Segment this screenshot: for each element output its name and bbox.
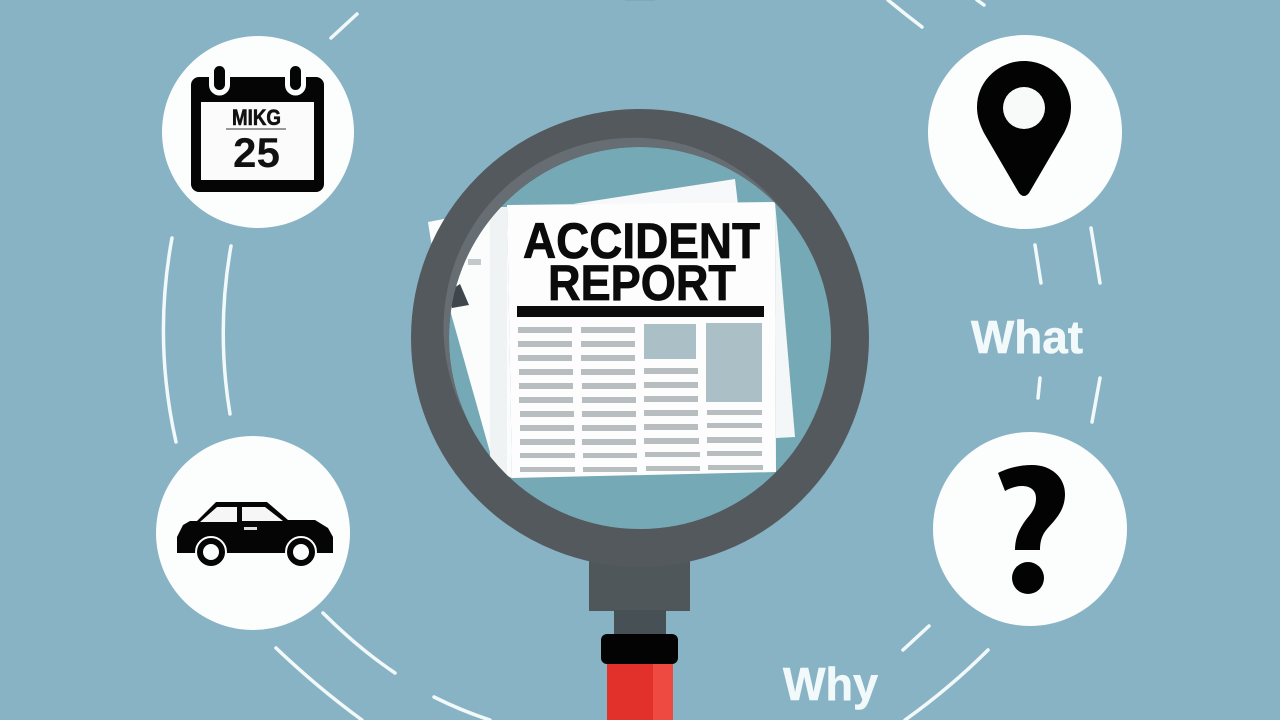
front page [507,202,776,478]
icon: calendar badge: MIKG [232,105,281,130]
lens background [440,139,840,539]
newspaper stack [428,179,795,478]
icon: car badge [156,436,350,630]
icon: question mark badge [933,432,1127,626]
back sheets [428,179,795,478]
label: What: What [971,311,1083,363]
icon: location pin badge [928,35,1122,229]
images [644,324,696,359]
magnifying glass handle [589,560,690,720]
text columns [518,327,763,472]
headline: ACCIDENT [523,213,760,269]
front page: REPORT [548,255,736,311]
label: Why: Why [783,658,878,710]
magnifying glass ring [430,128,850,548]
icon: calendar badge [162,36,354,228]
icon: calendar badge: 25 [233,129,280,176]
